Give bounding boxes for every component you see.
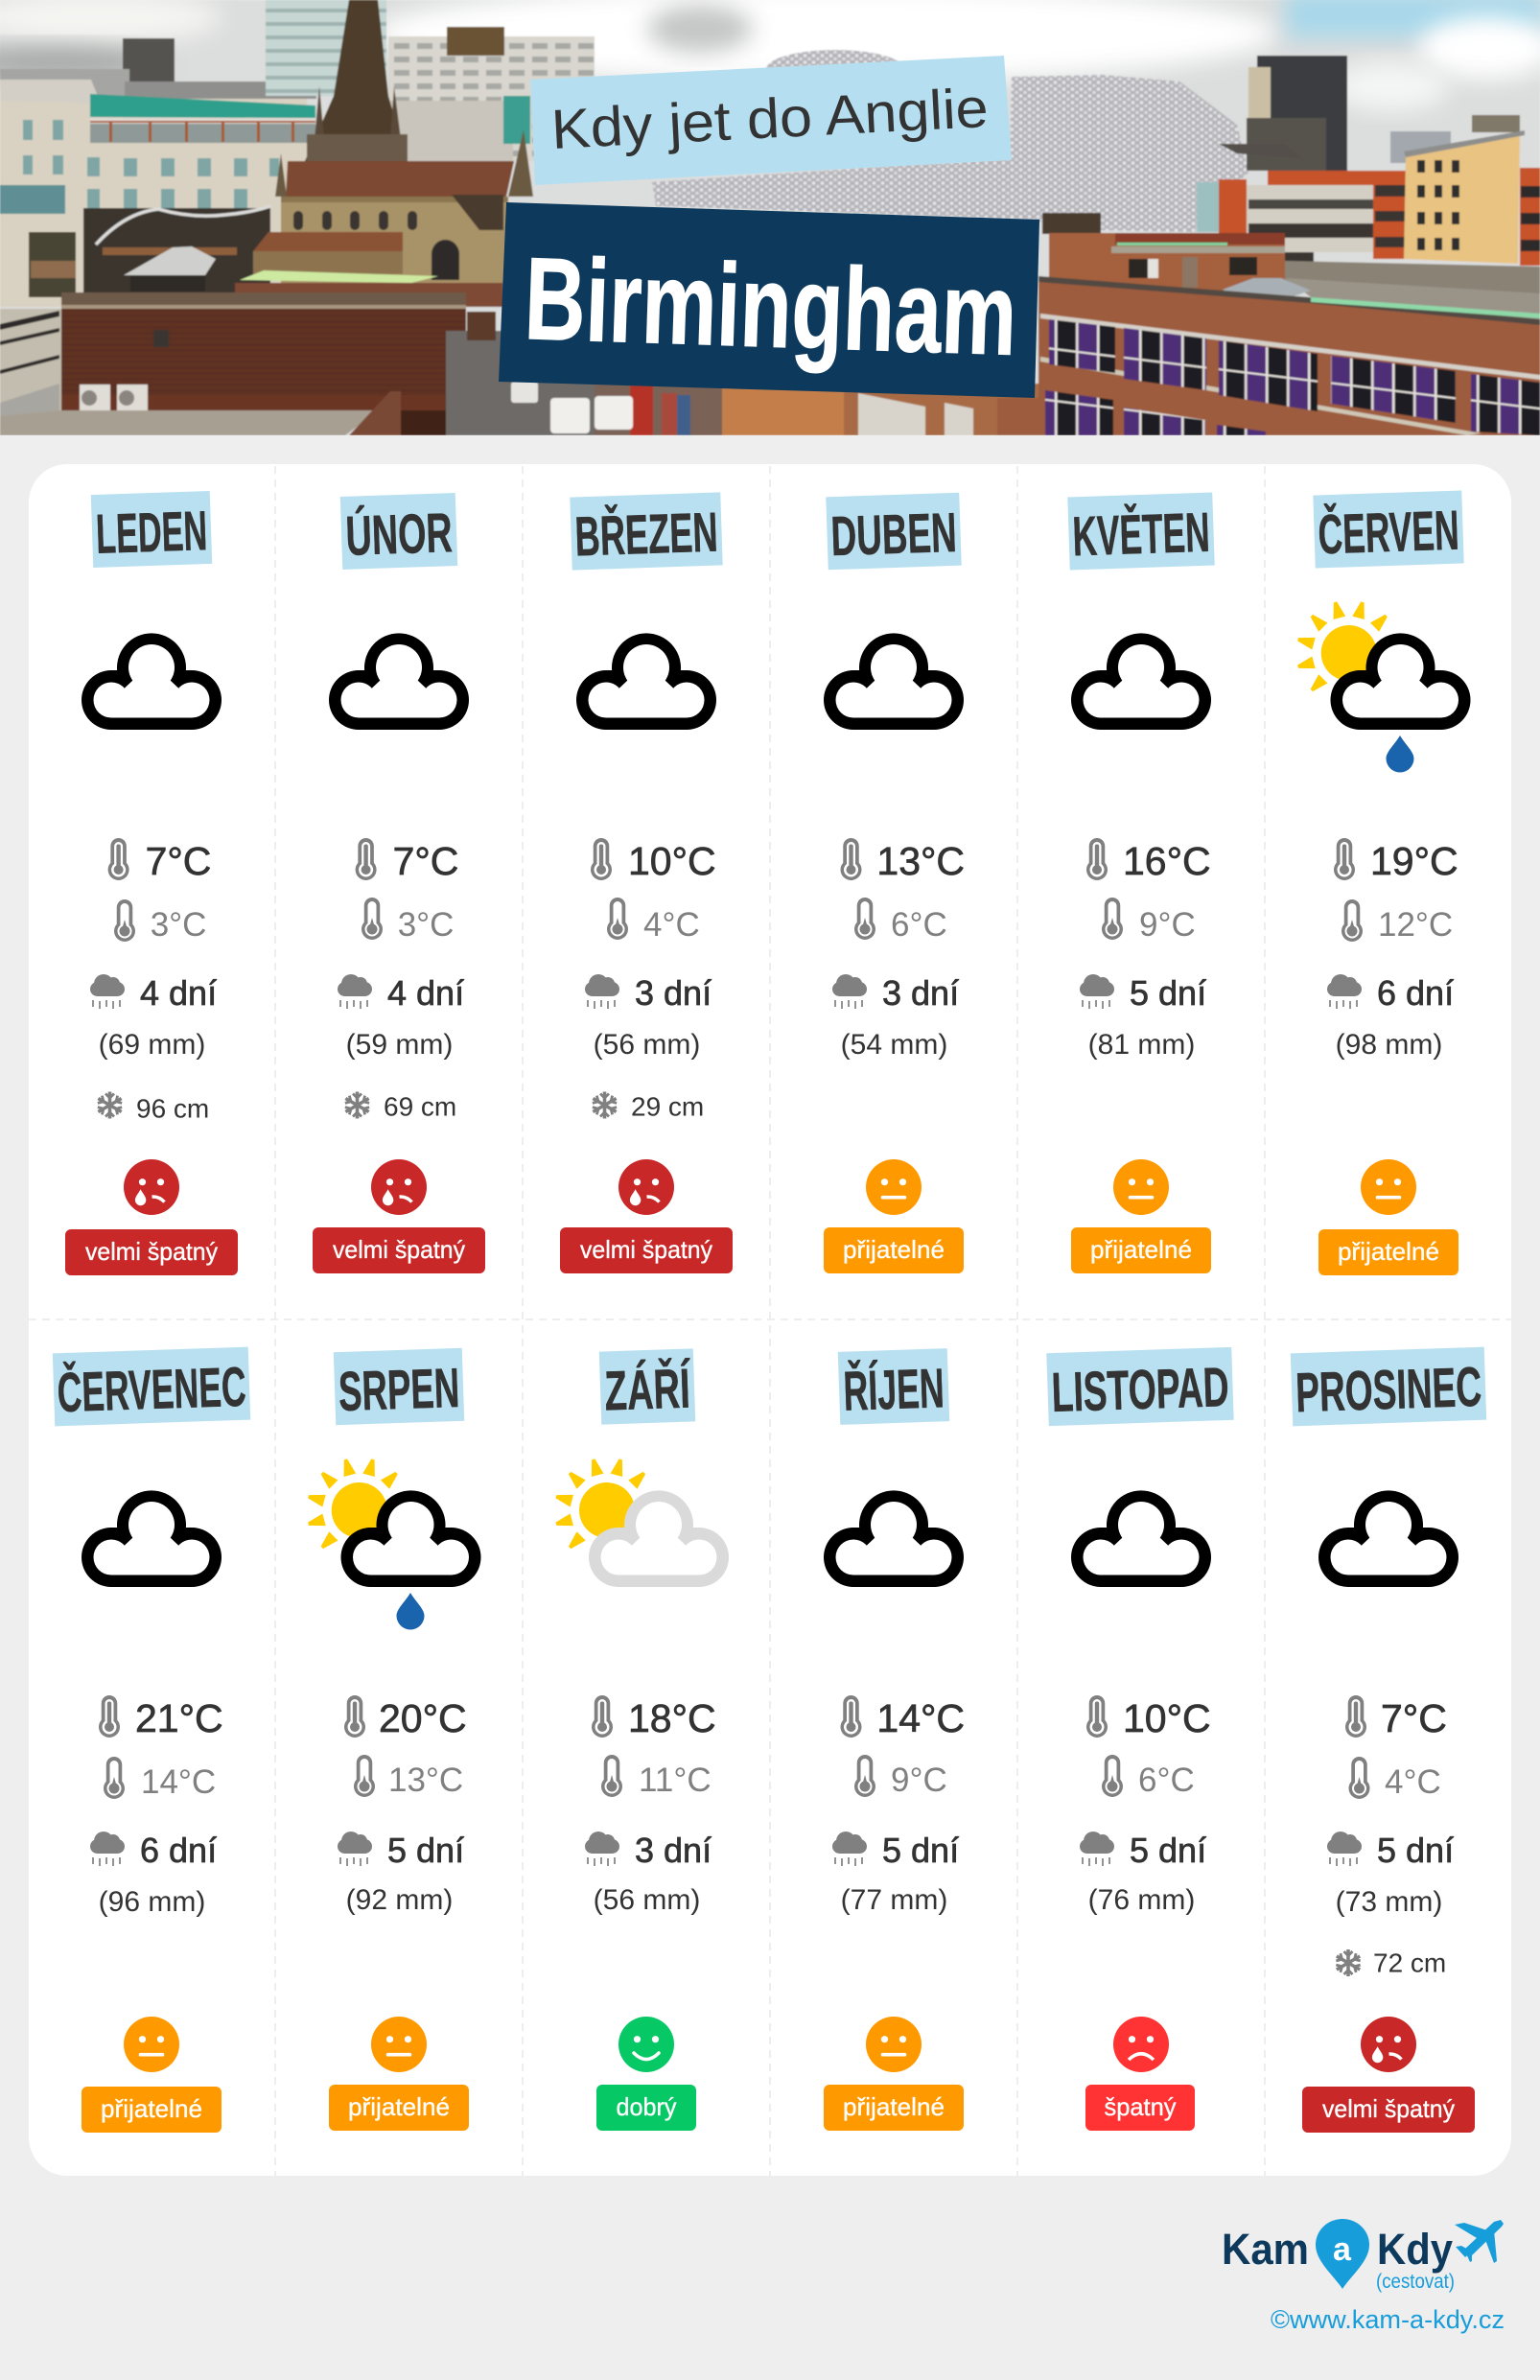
rating badge	[1071, 1227, 1211, 1273]
icon: rating face	[371, 2017, 427, 2072]
panel: červen	[1296, 490, 1471, 1275]
heading: ČERVENEC	[53, 1347, 250, 1426]
heading: SRPEN: SRPEN	[338, 1357, 460, 1423]
icon: rating face	[1113, 1159, 1169, 1215]
snowfall: 96 cm	[136, 1094, 209, 1124]
precipitation: (98 mm)	[1336, 1029, 1442, 1061]
icon: rating face	[124, 2017, 179, 2072]
rating badge: dobrý	[616, 2092, 677, 2121]
min temperature: 6°C	[891, 906, 947, 944]
heading: LISTOPAD: LISTOPAD	[1051, 1356, 1230, 1424]
rating badge	[329, 2085, 469, 2131]
icon: thermometer low	[601, 1755, 622, 1797]
rating badge	[1085, 2085, 1195, 2131]
rain days: 4 dní	[387, 973, 464, 1013]
icon: rain	[338, 1832, 372, 1866]
icon: cloud	[82, 1490, 222, 1587]
panel: leden	[65, 491, 238, 1275]
snowfall: 72 cm	[1373, 1948, 1446, 1978]
icon: rating face	[1361, 1159, 1416, 1215]
rating badge: velmi špatný	[85, 1237, 218, 1266]
heading: KVĚTEN	[1067, 493, 1215, 570]
header photo: Birmingham skyline	[0, 0, 1540, 435]
icon: cloud	[1318, 1490, 1458, 1587]
logo word: Kam: Kam	[1222, 2225, 1309, 2274]
icon: rain	[1080, 1832, 1114, 1866]
icon: thermometer high	[1345, 1695, 1366, 1738]
min temperature: 13°C	[388, 1762, 463, 1799]
icon: thermometer high	[1334, 838, 1355, 880]
icon: rating face	[618, 2017, 674, 2072]
icon: rain	[90, 974, 125, 1009]
icon: cloud	[824, 1490, 964, 1587]
max temperature: 16°C	[1123, 839, 1211, 883]
icon: rating face	[371, 1159, 427, 1215]
icon: rating face	[618, 1159, 674, 1215]
icon: cloud	[576, 633, 716, 730]
icon: rain	[338, 974, 372, 1009]
icon: map pin	[1316, 2219, 1369, 2289]
panel: říjen	[824, 1348, 965, 2131]
icon: thermometer low	[1348, 1757, 1369, 1799]
precipitation: (73 mm)	[1336, 1886, 1442, 1918]
panel: duben	[824, 493, 965, 1273]
icon: rain	[585, 1832, 619, 1866]
icon: rain	[1327, 1832, 1362, 1866]
precipitation: (56 mm)	[594, 1884, 700, 1916]
icon: cloud	[1071, 1490, 1211, 1587]
rain days: 5 dní	[882, 1831, 959, 1870]
max temperature: 20°C	[379, 1696, 467, 1740]
rating badge	[824, 2085, 964, 2131]
title tag: Birmingham	[499, 202, 1039, 398]
max temperature: 18°C	[628, 1696, 716, 1740]
icon: rain	[585, 974, 619, 1009]
rating badge: velmi špatný	[1322, 2094, 1455, 2123]
min temperature: 3°C	[151, 906, 206, 944]
heading: SRPEN	[334, 1348, 464, 1425]
rain days: 5 dní	[1377, 1831, 1454, 1870]
panel: únor	[313, 493, 485, 1273]
heading: ŘÍJEN	[838, 1348, 949, 1425]
icon: snow	[96, 1091, 124, 1118]
precipitation: (76 mm)	[1088, 1884, 1195, 1916]
rating badge: přijatelné	[843, 2092, 945, 2121]
icon: thermometer low	[607, 898, 628, 940]
rain days: 3 dní	[882, 973, 959, 1013]
max temperature: 7°C	[393, 839, 458, 883]
icon: airplane	[1455, 2220, 1504, 2263]
precipitation: (96 mm)	[99, 1886, 205, 1918]
rain days: 5 dní	[1130, 973, 1206, 1013]
icon: sun and grey cloud	[554, 1458, 729, 1587]
icon: thermometer low	[854, 1755, 875, 1797]
icon: cloud	[329, 633, 469, 730]
max temperature: 13°C	[876, 839, 965, 883]
heading: DUBEN: DUBEN	[830, 502, 958, 568]
icon: rating face	[124, 1159, 179, 1215]
icon: thermometer high	[591, 838, 612, 880]
icon: thermometer high	[356, 838, 377, 880]
max temperature: 14°C	[876, 1696, 965, 1740]
icon: cloud	[824, 633, 964, 730]
heading: ZÁŘÍ	[599, 1348, 695, 1425]
min temperature: 9°C	[891, 1762, 947, 1799]
icon: thermometer high	[344, 1695, 365, 1738]
snowfall: 29 cm	[631, 1091, 704, 1122]
precipitation: (59 mm)	[346, 1029, 453, 1061]
icon: cloud	[82, 633, 222, 730]
rating badge: přijatelné	[843, 1235, 945, 1264]
icon: thermometer high	[108, 838, 129, 880]
icon: thermometer low	[1102, 898, 1123, 940]
min temperature: 4°C	[1385, 1763, 1441, 1801]
icon: sun, cloud and rain drop	[1296, 600, 1471, 773]
rating badge: velmi špatný	[333, 1235, 465, 1264]
logo: Kam a Kdy	[1222, 2219, 1504, 2293]
rating badge	[560, 1227, 733, 1273]
heading: ZÁŘÍ: ZÁŘÍ	[604, 1357, 692, 1422]
heading: ČERVEN	[1313, 490, 1464, 569]
rating badge: špatný	[1105, 2092, 1176, 2121]
max temperature: 7°C	[146, 839, 211, 883]
website url: ©www.kam-a-kdy.cz	[1271, 2305, 1505, 2334]
icon: rating face	[1113, 2017, 1169, 2072]
rating badge	[824, 1227, 964, 1273]
max temperature: 21°C	[135, 1696, 223, 1740]
heading: LEDEN: LEDEN	[95, 500, 208, 566]
heading: ČERVENEC: ČERVENEC	[57, 1356, 247, 1424]
icon: rating face	[866, 1159, 922, 1215]
icon: thermometer low	[362, 898, 383, 940]
heading: DUBEN	[826, 493, 962, 570]
icon: rain	[1080, 974, 1114, 1009]
panel: květen	[1067, 493, 1215, 1273]
rain days: 5 dní	[387, 1831, 464, 1870]
icon: thermometer high	[840, 1695, 861, 1738]
precipitation: (69 mm)	[99, 1029, 205, 1061]
min temperature: 6°C	[1138, 1762, 1195, 1799]
icon: rating face	[1361, 2017, 1416, 2072]
logo subtitle: (cestovat)	[1376, 2271, 1455, 2293]
icon: thermometer high	[1086, 1695, 1108, 1738]
heading: ŘÍJEN: ŘÍJEN	[843, 1357, 945, 1423]
rating badge: přijatelné	[101, 2094, 202, 2123]
panel: září	[554, 1348, 729, 2131]
precipitation: (81 mm)	[1088, 1029, 1195, 1061]
title tag: Kdy jet do Anglie: Kdy jet do Anglie	[549, 77, 990, 161]
rating badge	[313, 1227, 485, 1273]
max temperature: 19°C	[1370, 839, 1458, 883]
max temperature: 10°C	[1123, 1696, 1211, 1740]
logo word: Kdy: Kdy	[1377, 2225, 1453, 2274]
icon: rain	[1327, 974, 1362, 1009]
title tag: Birmingham: Birmingham	[523, 233, 1018, 380]
rating badge	[1302, 2087, 1475, 2133]
rating badge	[1318, 1229, 1458, 1275]
icon: snow	[1335, 1949, 1362, 1976]
panel: months card	[29, 464, 1511, 2176]
icon: thermometer high	[1086, 838, 1108, 880]
icon: thermometer high	[840, 838, 861, 880]
panel: srpen	[307, 1348, 481, 2131]
icon: sun, cloud and rain drop	[307, 1458, 481, 1630]
icon: thermometer low	[354, 1755, 375, 1797]
icon: rain	[90, 1832, 125, 1866]
rain days: 6 dní	[1377, 973, 1454, 1013]
heading: ÚNOR	[340, 493, 457, 570]
icon: thermometer low	[114, 899, 135, 942]
rating badge: přijatelné	[1090, 1235, 1192, 1264]
rain days: 6 dní	[140, 1831, 217, 1870]
logo letter: a: a	[1333, 2231, 1352, 2268]
icon: thermometer low	[1342, 899, 1363, 942]
rating badge	[82, 2087, 222, 2133]
panel: březen	[560, 492, 733, 1273]
max temperature: 10°C	[628, 839, 716, 883]
rating badge: přijatelné	[1338, 1237, 1439, 1266]
min temperature: 12°C	[1378, 906, 1453, 944]
rating badge: velmi špatný	[580, 1235, 712, 1264]
panel: červenec	[53, 1347, 250, 2133]
panel: listopad	[1046, 1347, 1234, 2131]
precipitation: (56 mm)	[594, 1029, 700, 1061]
rain days: 3 dní	[635, 1831, 712, 1870]
precipitation: (54 mm)	[841, 1029, 947, 1061]
snowfall: 69 cm	[384, 1091, 456, 1122]
icon: thermometer low	[854, 898, 875, 940]
precipitation: (77 mm)	[841, 1884, 947, 1916]
rating badge	[65, 1229, 238, 1275]
icon: rain	[832, 1832, 867, 1866]
min temperature: 11°C	[639, 1762, 712, 1799]
icon: rating face	[866, 2017, 922, 2072]
rating badge	[596, 2085, 696, 2131]
title tag: Kdy jet do Anglie	[530, 56, 1012, 185]
icon: thermometer low	[104, 1757, 125, 1799]
heading: BŘEZEN: BŘEZEN	[574, 502, 719, 568]
heading: BŘEZEN	[570, 492, 723, 571]
icon: rain	[832, 974, 867, 1009]
min temperature: 14°C	[141, 1763, 216, 1801]
precipitation: (92 mm)	[346, 1884, 453, 1916]
min temperature: 4°C	[643, 906, 700, 944]
rain days: 3 dní	[635, 973, 712, 1013]
rating badge: přijatelné	[348, 2092, 450, 2121]
heading: ÚNOR: ÚNOR	[345, 502, 454, 568]
icon: snow	[591, 1091, 618, 1118]
icon: thermometer high	[99, 1695, 120, 1738]
icon: thermometer high	[592, 1695, 613, 1738]
panel: prosinec	[1291, 1347, 1486, 2133]
heading: LISTOPAD	[1046, 1347, 1234, 1426]
icon: thermometer low	[1102, 1755, 1123, 1797]
heading: KVĚTEN: KVĚTEN	[1072, 502, 1211, 568]
icon: snow	[343, 1091, 371, 1118]
min temperature: 9°C	[1139, 906, 1196, 944]
heading: LEDEN	[91, 491, 212, 568]
rain days: 4 dní	[140, 973, 217, 1013]
rain days: 5 dní	[1130, 1831, 1206, 1870]
icon: cloud	[1071, 633, 1211, 730]
min temperature: 3°C	[398, 906, 454, 944]
max temperature: 7°C	[1381, 1696, 1447, 1740]
